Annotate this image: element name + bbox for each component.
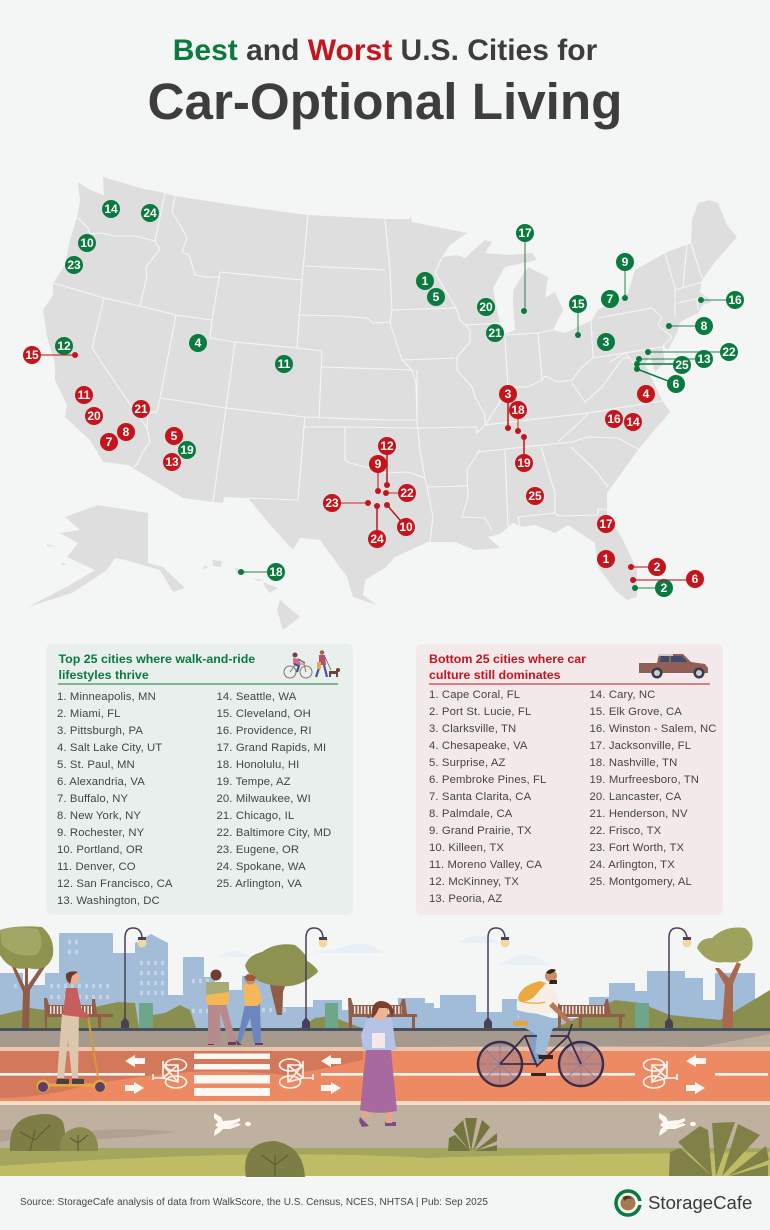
- list: cities 1 to 13: 7. Santa Clarita, CA: [429, 790, 531, 802]
- lane arrows: [125, 1055, 706, 1094]
- list: cities 14 to 25: 19. Murfreesboro, TN: [590, 774, 699, 786]
- marker green 21: [486, 324, 504, 342]
- marker red 13: 13: [165, 455, 179, 469]
- source line: Source: StorageCafe analysis of data from WalkScore, the U.S. Census, NCES, NHTSA | Pub: Sep 2025: [20, 1197, 488, 1208]
- title line 2: Car-Optional Living: [148, 73, 622, 130]
- marker red 2: [628, 558, 666, 576]
- marker red 18: [509, 401, 527, 434]
- marker red 8: 8: [123, 425, 130, 439]
- lamp heads and bases: [121, 937, 692, 1028]
- hills: [0, 990, 770, 1028]
- marker green 21: 21: [488, 326, 502, 340]
- list: cities 14 to 25: 19. Tempe, AZ: [216, 776, 291, 788]
- marker red 2: 2: [654, 560, 661, 574]
- marker red 23: 23: [325, 496, 339, 510]
- lane dividers: [0, 1073, 768, 1076]
- list: cities 14 to 25: 16. Providence, RI: [216, 724, 312, 736]
- marker green 6: 6: [673, 377, 680, 391]
- icon: coffee cup logo: [614, 1189, 642, 1217]
- pedestrian lane icons: [214, 1113, 696, 1136]
- marker red 17: [597, 515, 615, 533]
- marker red 1: [597, 550, 615, 568]
- marker red 5: [165, 427, 183, 445]
- marker green 5: [427, 288, 445, 306]
- Hawaii: [203, 560, 300, 630]
- marker green 20: 20: [479, 300, 493, 314]
- marker green 10: 10: [80, 236, 94, 250]
- marker green 13: [636, 350, 713, 368]
- state borders: [53, 193, 705, 542]
- marker red 11: [75, 386, 93, 404]
- icon: pickup truck: [639, 654, 708, 678]
- marker red 16: [605, 410, 623, 428]
- marker red 6: 6: [692, 572, 699, 586]
- marker red 25: [526, 487, 544, 505]
- marker green 22: [645, 343, 738, 361]
- marker red 5: 5: [171, 429, 178, 443]
- marker green 18: 18: [269, 565, 283, 579]
- clouds: [220, 936, 550, 965]
- marker green 19: [178, 441, 196, 459]
- title line 1: Best and Worst U.S. Cities for: [173, 34, 597, 67]
- marker red 24: [368, 503, 386, 548]
- marker green 1: [416, 272, 434, 290]
- panel heading: bottom 25: culture still dominates: [429, 668, 561, 682]
- marker red 7: [100, 433, 118, 451]
- city skyline: [0, 933, 755, 1028]
- marker green 18: [238, 563, 285, 581]
- marker green 2: [632, 579, 673, 597]
- street illustration: [0, 926, 770, 1177]
- list: cities 14 to 25: 23. Fort Worth, TX: [590, 842, 684, 854]
- list: cities 1 to 13: 1. Minneapolis, MN: [57, 690, 156, 702]
- marker green 4: [189, 334, 207, 352]
- marker red 12: [378, 437, 396, 488]
- list: cities 1 to 13: 9. Rochester, NY: [57, 826, 144, 838]
- marker red 13: [163, 453, 181, 471]
- marker red 7: 7: [106, 435, 113, 449]
- list: cities 1 to 13: 11. Moreno Valley, CA: [429, 858, 542, 870]
- list: cities 14 to 25: 21. Chicago, IL: [216, 810, 294, 822]
- marker red 9: [369, 455, 387, 494]
- marker green 24: 24: [143, 206, 157, 220]
- marker green 16: 16: [728, 293, 742, 307]
- woman with skirt: [359, 1001, 397, 1127]
- marker green 7: [601, 290, 619, 308]
- marker red 19: [515, 434, 533, 472]
- list: cities 1 to 13: 8. Palmdale, CA: [429, 808, 512, 820]
- marker green 23: 23: [67, 258, 81, 272]
- marker green 12: [55, 337, 73, 355]
- marker green 9: [616, 253, 634, 301]
- marker red 10: [384, 502, 415, 536]
- marker green 11: [275, 355, 293, 373]
- panel: bottom 25 cities: [416, 644, 723, 915]
- list: cities 1 to 13: [57, 690, 173, 906]
- marker red 12: 12: [380, 439, 394, 453]
- marker green 10: [78, 234, 96, 252]
- marker green 3: [597, 333, 615, 351]
- marker green 8: [666, 317, 713, 335]
- marker green 14: [102, 200, 120, 218]
- list: cities 14 to 25: 16. Winston - Salem, NC: [590, 722, 717, 734]
- two people standing: [206, 970, 263, 1045]
- marker green 23: [65, 256, 83, 274]
- list: cities 1 to 13: 9. Grand Prairie, TX: [429, 824, 532, 836]
- marker red 6: [630, 570, 704, 588]
- list: cities 1 to 13: 13. Peoria, AZ: [429, 892, 502, 904]
- marker green 25: 25: [675, 358, 689, 372]
- marker red 10: 10: [399, 520, 413, 534]
- tree middle: [245, 944, 318, 1015]
- list: cities 1 to 13: 2. Port St. Lucie, FL: [429, 706, 531, 718]
- tree left: [0, 926, 53, 1028]
- list: cities 1 to 13: 11. Denver, CO: [57, 860, 136, 872]
- marker green 15: [569, 295, 587, 338]
- list: cities 1 to 13: 12. San Francisco, CA: [57, 878, 173, 890]
- building windows: [14, 942, 290, 1011]
- list: cities 14 to 25: 17. Grand Rapids, MI: [216, 742, 326, 754]
- marker red 8: [117, 423, 135, 441]
- marker red 17: 17: [599, 517, 613, 531]
- benches: [44, 998, 625, 1028]
- marker red 25: 25: [528, 489, 542, 503]
- marker green 17: [516, 224, 534, 314]
- marker green 14: 14: [104, 202, 118, 216]
- marker green 9: 9: [622, 255, 629, 269]
- crosswalk: [194, 1054, 270, 1096]
- list: cities 1 to 13: 2. Miami, FL: [57, 708, 121, 720]
- list: cities 14 to 25: 21. Henderson, NV: [590, 808, 688, 820]
- list: cities 14 to 25: 20. Milwaukee, WI: [216, 792, 311, 804]
- icon: cyclist and dog walker: [284, 650, 340, 678]
- marker green 4: 4: [195, 336, 202, 350]
- list: cities 1 to 13: [429, 688, 546, 904]
- marker red 3: [499, 385, 517, 431]
- marker green 22: 22: [722, 345, 736, 359]
- marker red 11: 11: [78, 388, 91, 402]
- panel heading: top 25: [58, 652, 255, 682]
- marker red 18: 18: [511, 403, 525, 417]
- list: cities 14 to 25: 15. Elk Grove, CA: [590, 706, 682, 718]
- marker green 15: 15: [571, 297, 585, 311]
- marker red 16: 16: [607, 412, 621, 426]
- marker green 2: 2: [661, 581, 668, 595]
- marker red 1: 1: [603, 552, 610, 566]
- contiguous states land: [43, 177, 737, 605]
- marker red 15: 15: [25, 348, 39, 362]
- list: cities 14 to 25: 14. Cary, NC: [590, 688, 655, 700]
- bins: [139, 1003, 649, 1028]
- marker red 21: [132, 400, 150, 418]
- marker green 7: 7: [607, 292, 614, 306]
- list: cities 14 to 25: 18. Honolulu, HI: [216, 758, 299, 770]
- person on scooter: [36, 971, 106, 1092]
- marker green 5: 5: [433, 290, 440, 304]
- marker red 14: [624, 413, 642, 431]
- list: cities 1 to 13: 7. Buffalo, NY: [57, 792, 128, 804]
- list: cities 14 to 25: 22. Baltimore City, MD: [216, 826, 331, 838]
- bench slats: [50, 1006, 606, 1014]
- list: cities 1 to 13: 13. Washington, DC: [57, 894, 160, 906]
- marker red 4: [637, 385, 655, 403]
- marker red 19: 19: [517, 456, 531, 470]
- panel heading: top 25: lifestyles thrive: [58, 668, 149, 682]
- list: cities 14 to 25: [590, 688, 717, 888]
- marker red 22: [383, 484, 416, 502]
- list: cities 14 to 25: 25. Montgomery, AL: [590, 876, 692, 888]
- marker red 9: 9: [375, 457, 382, 471]
- marker green 11: 11: [278, 357, 291, 371]
- heading rule: [58, 683, 338, 685]
- panel heading: top 25: Top 25 cities where walk-and-ride: [58, 652, 255, 666]
- heading rule: [429, 683, 710, 685]
- panel: top 25 cities: [46, 644, 353, 915]
- marker green 16: [698, 291, 744, 309]
- list: cities 1 to 13: 8. New York, NY: [57, 810, 141, 822]
- list: cities 1 to 13: 6. Alexandria, VA: [57, 776, 145, 788]
- list: cities 14 to 25: 22. Frisco, TX: [590, 824, 661, 836]
- marker green 20: [477, 298, 495, 316]
- marker green 24: [141, 204, 159, 222]
- marker red 14: 14: [626, 415, 640, 429]
- logo: [614, 1189, 752, 1217]
- tree right: [697, 927, 753, 1028]
- cyclist: [478, 969, 603, 1086]
- title: [148, 34, 622, 130]
- list: cities 1 to 13: 3. Clarksville, TN: [429, 722, 516, 734]
- list: cities 1 to 13: 4. Salt Lake City, UT: [57, 742, 162, 754]
- list: cities 1 to 13: 12. McKinney, TX: [429, 876, 519, 888]
- list: cities 14 to 25: 24. Spokane, WA: [216, 860, 306, 872]
- list: cities 1 to 13: 3. Pittsburgh, PA: [57, 724, 143, 736]
- marker red 20: 20: [87, 409, 101, 423]
- marker green 17: 17: [518, 226, 532, 240]
- lamp posts: [125, 928, 687, 1022]
- list: cities 14 to 25: [216, 690, 331, 890]
- list: cities 1 to 13: 10. Portland, OR: [57, 844, 143, 856]
- marker red 22: 22: [400, 486, 414, 500]
- Alaska: [28, 505, 185, 607]
- shrub branches: [20, 1125, 288, 1176]
- list: cities 14 to 25: 14. Seattle, WA: [216, 690, 296, 702]
- marker green 8: 8: [701, 319, 708, 333]
- marker green 13: 13: [697, 352, 711, 366]
- map of the United States: [23, 177, 744, 630]
- marker red 20: [85, 407, 103, 425]
- marker red 23: [323, 494, 371, 512]
- marker red 3: 3: [505, 387, 512, 401]
- list: cities 14 to 25: 18. Nashville, TN: [590, 756, 677, 768]
- list: cities 14 to 25: 23. Eugene, OR: [216, 844, 299, 856]
- marker green 6: [634, 366, 685, 393]
- marker green 25: [634, 356, 691, 374]
- marker green 19: 19: [180, 443, 194, 457]
- list: cities 1 to 13: 5. Surprise, AZ: [429, 756, 506, 768]
- list: cities 1 to 13: 6. Pembroke Pines, FL: [429, 774, 546, 786]
- list: cities 14 to 25: 25. Arlington, VA: [216, 878, 302, 890]
- list: cities 1 to 13: 10. Killeen, TX: [429, 842, 504, 854]
- list: cities 14 to 25: 17. Jacksonville, FL: [590, 740, 691, 752]
- marker red 21: 21: [134, 402, 148, 416]
- road and grass ground: [0, 1028, 770, 1176]
- list: cities 1 to 13: 5. St. Paul, MN: [57, 758, 135, 770]
- list: cities 1 to 13: 1. Cape Coral, FL: [429, 688, 520, 700]
- marker green 12: 12: [57, 339, 71, 353]
- marker red 15: [23, 346, 78, 364]
- marker red 24: 24: [370, 532, 384, 546]
- list: cities 14 to 25: 15. Cleveland, OH: [216, 708, 311, 720]
- shrubs: [10, 1114, 769, 1177]
- bike lane icons: [153, 1059, 677, 1088]
- marker red 4: 4: [643, 387, 650, 401]
- brand name: StorageCafe: [648, 1192, 752, 1213]
- marker green 3: 3: [603, 335, 610, 349]
- list: cities 14 to 25: 20. Lancaster, CA: [590, 790, 681, 802]
- marker green 1: 1: [422, 274, 429, 288]
- list: cities 1 to 13: 4. Chesapeake, VA: [429, 740, 528, 752]
- panel heading: bottom 25: Bottom 25 cities where car: [429, 652, 586, 666]
- list: cities 14 to 25: 24. Arlington, TX: [590, 858, 675, 870]
- panel heading: bottom 25: [429, 652, 586, 682]
